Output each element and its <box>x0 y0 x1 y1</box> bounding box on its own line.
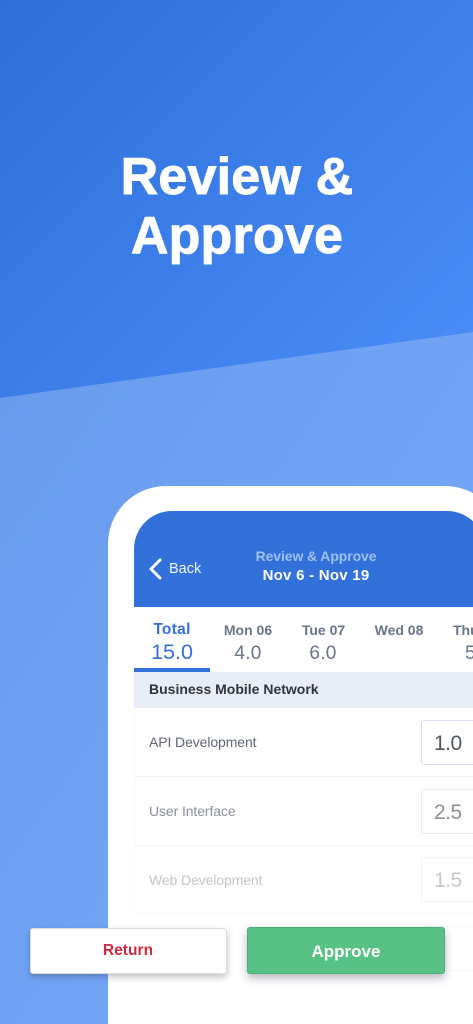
row: User Interface <box>134 777 473 846</box>
value: 2.5 <box>434 801 462 824</box>
value: 1.5 <box>434 869 462 892</box>
title: Review & <box>121 148 353 206</box>
section header <box>134 672 473 708</box>
phone mockup <box>108 486 473 1024</box>
tab label: Total <box>153 621 191 638</box>
hours input <box>421 720 473 765</box>
back label: Back <box>169 561 201 577</box>
return button <box>30 928 227 974</box>
tab label: Wed 08 <box>375 622 423 638</box>
tab label: Tue 07 <box>302 622 345 638</box>
hours input <box>421 857 473 902</box>
row: Web Development <box>134 846 473 914</box>
tab value: 15.0 <box>151 640 193 664</box>
row: API Development <box>134 708 473 777</box>
tab value: 6.0 <box>309 643 337 664</box>
title: Approve <box>131 207 343 265</box>
value: 1.0 <box>434 732 462 755</box>
tab: monday <box>224 622 272 664</box>
tab: total <box>134 621 210 672</box>
row label: API Development <box>149 734 256 750</box>
tab label: Mon 06 <box>224 622 272 638</box>
return label: Return <box>103 942 153 959</box>
section title: Business Mobile Network <box>149 681 319 697</box>
approve button <box>247 927 445 974</box>
row label: User Interface <box>149 803 236 819</box>
faded input <box>421 926 473 971</box>
title <box>121 148 353 265</box>
tab: thursday <box>453 622 473 664</box>
row label: Web Development <box>149 872 262 888</box>
header subtitle: Review & Approve <box>256 548 376 564</box>
app header <box>134 511 473 607</box>
hours input <box>421 789 473 834</box>
tab value: 4.0 <box>234 643 262 664</box>
icon: back chevron <box>149 558 162 580</box>
active underline <box>134 668 210 672</box>
tab: tuesday <box>302 622 345 664</box>
app screen <box>134 511 473 902</box>
approve label: Approve <box>312 942 380 961</box>
header dates: Nov 6 - Nov 19 <box>263 567 369 584</box>
